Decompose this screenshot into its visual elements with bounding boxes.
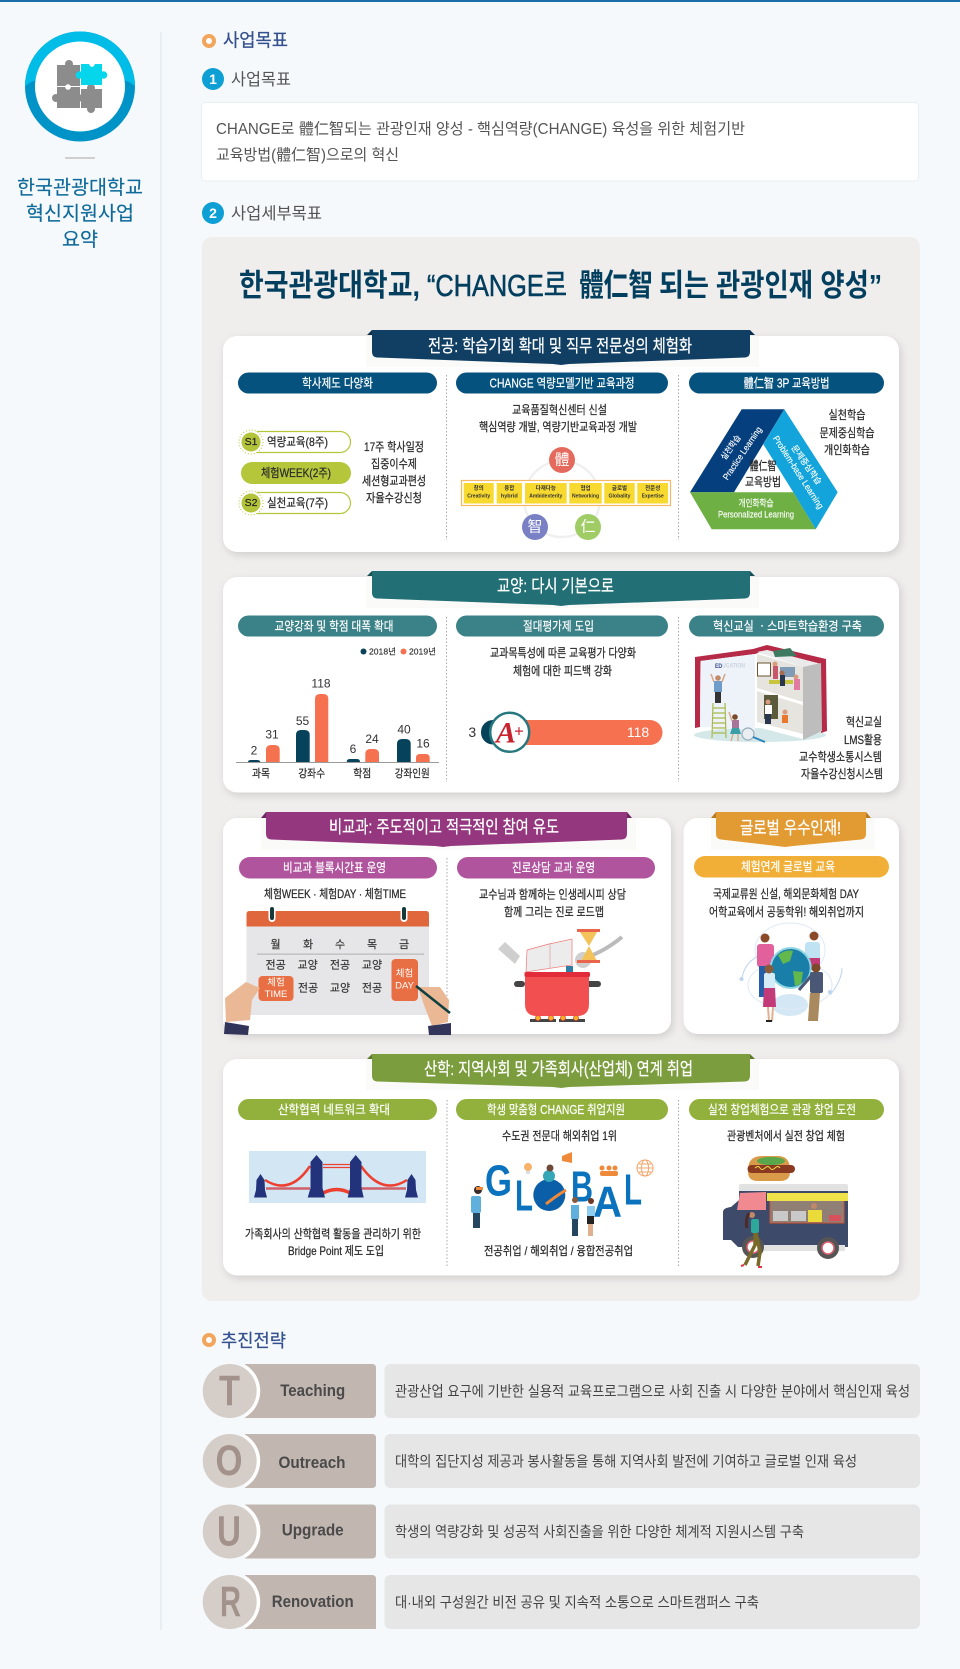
strategy row: Outreach: Outreach: [278, 1454, 346, 1472]
semester notes: 자율수강신청: [366, 491, 422, 505]
strategy row: Teaching: [203, 1364, 920, 1418]
subheading 1: 사업목표: 1: [209, 71, 217, 87]
strategy row: Upgrade: 학생의 역량강화 및 성공적 사회진출을 위한 다양한 체계적 지원시스템 구축: [395, 1524, 804, 1541]
subheading 2: 사업세부목표: [202, 202, 322, 224]
pill: 학사제도 다양화: [238, 372, 437, 394]
calendar illustration: 체험: [396, 968, 413, 980]
triangle diagram: 3P: [690, 409, 838, 529]
competency diagram: 창의: [474, 484, 484, 492]
calendar illustration: 체험: [267, 978, 285, 988]
pill: 학사제도 다양화: 학사제도 다양화: [302, 376, 373, 390]
ribbon: 글로벌 우수인재: 글로벌 우수인재!: [740, 818, 841, 838]
bridge point text: [245, 1227, 421, 1258]
illustration: GLOBAL lettering: [471, 1152, 653, 1236]
semester notes: 17주 학사일정: [364, 440, 424, 454]
pill: 혁신교실 스마트학습환경 구축: [689, 616, 884, 636]
learning methods text: 문제중심학습: [820, 426, 874, 440]
semester diagram: S2: [245, 497, 258, 509]
ribbon: 교양: 교양: 다시 기본으로: [497, 576, 614, 596]
panel title: 體仁智: [579, 268, 653, 303]
pill: 교양강좌 및 학점 대폭 확대: 교양강좌 및 학점 대폭 확대: [274, 620, 394, 634]
icon: puzzle emblem: [25, 32, 135, 142]
employment ranking text: 수도권 전문대 해외취업 1위: [502, 1129, 617, 1143]
competency diagram: Globality: [608, 494, 631, 500]
bar chart: [236, 677, 439, 780]
legend: 2018년: [369, 646, 396, 656]
strategy row: Upgrade: U: [217, 1508, 241, 1556]
heading: 추진전략: 추진전략: [221, 1331, 286, 1351]
bar chart: 과목: [252, 767, 270, 780]
goal text box: 교육방법(體仁智)으로의 혁신: [216, 146, 399, 164]
bar chart: 31: [265, 728, 279, 742]
subheading 2: 사업세부목표: 2: [209, 205, 217, 221]
strategy row: Teaching: Teaching: [280, 1382, 345, 1400]
classroom features text: 자율수강신청시스템: [801, 767, 883, 781]
evaluation text: 체험에 대한 피드백 강화: [513, 664, 612, 678]
pill: 3P 교육방법: 體仁智 3P 교육방법: [744, 376, 830, 390]
ribbon: 전공: [367, 330, 755, 365]
illustration: GLOBAL lettering: G: [485, 1156, 512, 1206]
panel: global talent: [684, 812, 899, 1034]
strategy row: Upgrade: Upgrade: [282, 1522, 344, 1540]
strategy row: Renovation: [203, 1575, 920, 1629]
strategy row: Teaching: T: [219, 1367, 240, 1415]
bar chart: 40: [397, 723, 411, 737]
sidebar title text: 한국관광대학교: [17, 177, 143, 199]
strategy row: Outreach: O: [216, 1437, 242, 1485]
competency diagram: Networking: [572, 494, 599, 500]
strategy row: Outreach: 대학의 집단지성 제공과 봉사활동을 통해 지역사회 발전에 기여하고 글로벌 인재 육성: [395, 1454, 857, 1470]
panel title: [239, 268, 882, 303]
competency diagram: 융합: [504, 484, 514, 492]
triangle diagram: 3P: 교육방법: [745, 475, 781, 489]
panel title: 되는: [659, 268, 709, 303]
illustration: education book: EDUCATION: [715, 662, 745, 670]
ribbon: 산학: [367, 1054, 755, 1088]
pill: 진로상담 교과 운영: [457, 857, 655, 878]
panel: major (전공): [223, 330, 899, 552]
timetable caption: 체험WEEK · 체험DAY · 체험TIME: [264, 887, 406, 901]
calendar illustration: 전공: [298, 982, 318, 994]
bridge point text: Bridge Point 제도 도입: [288, 1244, 384, 1258]
strategy row: Renovation: Renovation: [272, 1593, 354, 1611]
pill: 실전 창업체험으로 관광 창업 도전: 실전 창업체험으로 관광 창업 도전: [708, 1103, 856, 1117]
illustration: food truck: [723, 1156, 848, 1267]
calendar illustration: 교양: [362, 958, 382, 972]
subheading 1: 사업목표: 사업목표: [231, 70, 291, 89]
triangle diagram: 3P: 體仁智: [750, 458, 776, 473]
ribbon: 글로벌 우수인재: [711, 812, 871, 847]
pill: 진로상담 교과 운영: 진로상담 교과 운영: [512, 861, 595, 875]
career counseling text: [479, 888, 626, 919]
pill: 비교과 블록시간표 운영: 비교과 블록시간표 운영: [283, 861, 386, 875]
bar chart: 학점: [353, 767, 371, 780]
panel: extracurricular (비교과): [223, 812, 671, 1035]
bar chart: 16: [416, 737, 430, 751]
panel: liberal arts (교양): [223, 571, 899, 792]
strategy row: Renovation: R: [220, 1578, 241, 1626]
grade bar: 118: [627, 724, 649, 740]
semester notes: 세션형교과편성: [362, 474, 426, 488]
sidebar: program title: [17, 32, 143, 251]
semester diagram: [239, 430, 351, 515]
bridge point text: 가족회사의 산학협력 활동을 관리하기 위한: [245, 1227, 421, 1241]
learning methods text: [820, 407, 874, 457]
pill: 체험연계 글로벌 교육: [694, 856, 889, 878]
grade bar: [468, 713, 662, 752]
triangle diagram: 3P: Practice Learning: [721, 425, 764, 482]
semester diagram: 체험WEEK(2주): [261, 466, 331, 480]
bar chart: 55: [296, 714, 309, 728]
sidebar title text: 요약: [62, 229, 98, 251]
heading: 사업목표: 사업목표: [223, 30, 288, 50]
ribbon: 비교과: [261, 812, 632, 847]
pill: 절대평가제 도입: 절대평가제 도입: [523, 620, 594, 634]
strategy row: Teaching: 관광산업 요구에 기반한 실용적 교육프로그램으로 사회 진출 시 다양한 분야에서 핵심인재 육성: [395, 1384, 910, 1400]
triangle diagram: 3P: 실천학습: [719, 433, 743, 462]
pill: CHANGE 역량모델기반 교육과정: CHANGE 역량모델기반 교육과정: [490, 376, 634, 390]
calendar illustration: DAY: [395, 980, 415, 992]
global education text: [709, 887, 864, 919]
ribbon: 산학: 산학: 지역사회 및 가족회사(산업체) 연계 취업: [424, 1059, 693, 1079]
competency diagram: 仁: [580, 518, 596, 536]
sidebar title text: [17, 177, 143, 251]
ribbon: 교양: [367, 571, 755, 606]
competency diagram: 전문성: [645, 484, 660, 492]
competency diagram: 협업: [580, 484, 591, 492]
competency diagram: 다재다능: [536, 484, 556, 492]
calendar illustration: [224, 906, 451, 1035]
startup text: 관광벤처에서 실전 창업 체험: [727, 1129, 845, 1143]
competency text: 핵심역량 개발, 역량기반교육과정 개발: [479, 420, 637, 434]
calendar illustration: 전공: [330, 958, 350, 972]
ribbon: 비교과: 비교과: 주도적이고 적극적인 참여 유도: [329, 817, 559, 837]
bar chart: 강좌수: [298, 767, 325, 780]
illustration: tower bridge: [249, 1151, 426, 1203]
pill: 체험연계 글로벌 교육: 체험연계 글로벌 교육: [741, 860, 835, 874]
illustration: education book: [694, 645, 827, 742]
employment types text: 전공취업 / 해외취업 / 융합전공취업: [484, 1244, 633, 1258]
illustration: GLOBAL lettering: A: [593, 1178, 622, 1226]
pill: 산학협력 네트워크 확대: 산학협력 네트워크 확대: [278, 1103, 390, 1117]
panel: detailed goals: [202, 237, 920, 1301]
pill: CHANGE 역량모델기반 교육과정: [456, 372, 668, 394]
calendar illustration: 수: [335, 938, 345, 951]
classroom features text: 혁신교실: [846, 715, 882, 729]
strategy row: Outreach: [203, 1434, 920, 1488]
pill: 3P 교육방법: [689, 372, 884, 394]
goal text box: CHANGE로 體仁智되는 관광인재 양성 - 핵심역량(CHANGE) 육성을 위한 체험기반: [216, 120, 745, 138]
illustration: GLOBAL lettering: B: [571, 1162, 593, 1212]
competency diagram: Creativity: [467, 494, 491, 500]
calendar illustration: 교양: [330, 982, 350, 994]
competency text: 교육품질혁신센터 신설: [512, 403, 607, 417]
competency diagram: 글로벌: [612, 484, 627, 492]
panel title: 한국관광대학교,: [239, 268, 420, 303]
illustration: cooking pot: [498, 929, 622, 1022]
calendar illustration: 교양: [297, 958, 318, 972]
subheading 1: 사업목표: [202, 68, 291, 90]
evaluation text: 교과목특성에 따른 교육평가 다양화: [490, 646, 636, 660]
grade bar: 3: [468, 724, 476, 740]
pill: 교양강좌 및 학점 대폭 확대: [238, 616, 437, 636]
calendar illustration: 전공: [362, 982, 382, 994]
global education text: 국제교류원 신설, 해외문화체험 DAY: [713, 887, 859, 901]
career counseling text: 교수님과 함께하는 인생레시피 상담: [479, 888, 626, 902]
bar chart: 24: [365, 732, 379, 746]
learning methods text: 실천학습: [828, 407, 866, 422]
pill: 학생 맞춤형 CHANGE 취업지원: 학생 맞춤형 CHANGE 취업지원: [487, 1103, 625, 1117]
calendar illustration: TIME: [265, 989, 287, 1000]
illustration: GLOBAL lettering: L: [515, 1172, 533, 1220]
legend: 2019년: [409, 646, 436, 656]
strategy row: Upgrade: [203, 1504, 920, 1558]
competency text: [479, 403, 637, 434]
bar chart: 2: [251, 744, 258, 758]
illustration: people around globe: [740, 923, 842, 1021]
pill: 혁신교실 스마트학습환경 구축: 혁신교실 ㆍ스마트학습환경 구축: [713, 620, 862, 634]
illustration: GLOBAL lettering: L: [624, 1166, 642, 1214]
panel title: 관광인재 양성”: [716, 268, 882, 303]
bar chart: 강좌인원: [395, 767, 430, 780]
bar chart: 6: [350, 742, 357, 756]
competency diagram: Expertise: [642, 494, 664, 500]
calendar illustration: 화: [303, 938, 313, 951]
triangle diagram: 3P: 개인화학습: [738, 498, 774, 510]
triangle diagram: 3P: Problem-base Learning: [771, 434, 826, 511]
calendar illustration: 금: [399, 939, 409, 951]
semester notes: [362, 440, 426, 505]
triangle diagram: 3P: Personalized Learning: [718, 510, 794, 520]
evaluation text: [490, 646, 636, 678]
strategy row: Renovation: 대·내외 구성원간 비전 공유 및 지속적 소통으로 스마트캠퍼스 구축: [395, 1594, 759, 1612]
classroom features text: 교수학생소통시스템: [799, 750, 882, 764]
panel: industry (산학): [223, 1054, 899, 1276]
pill: 학생 맞춤형 CHANGE 취업지원: [456, 1099, 668, 1120]
calendar illustration: 목: [367, 938, 377, 951]
competency diagram: 智: [527, 518, 543, 536]
semester diagram: 실천교육(7주): [267, 495, 328, 510]
semester diagram: S1: [245, 436, 258, 448]
semester diagram: 역량교육(8주): [267, 435, 328, 449]
competency diagram: [462, 447, 670, 540]
classroom features text: [799, 715, 883, 781]
competency diagram: 體: [554, 452, 570, 468]
learning methods text: 개인화학습: [824, 443, 870, 457]
calendar illustration: 전공: [265, 958, 286, 972]
subheading 2: 사업세부목표: 사업세부목표: [231, 204, 322, 223]
competency diagram: hybrid: [501, 494, 518, 500]
bar chart: 118: [311, 677, 331, 691]
career counseling text: 함께 그리는 진로 로드맵: [504, 905, 604, 919]
semester notes: 집중이수제: [371, 457, 417, 471]
grade bar: +: [514, 722, 524, 740]
pill: 절대평가제 도입: [456, 616, 668, 636]
sidebar title text: 혁신지원사업: [26, 203, 134, 225]
global education text: 어학교육에서 공동학위! 해외취업까지: [709, 905, 864, 919]
pill: 비교과 블록시간표 운영: [239, 857, 437, 878]
legend: [360, 646, 436, 656]
goal text box: [202, 102, 918, 181]
grade bar: A: [494, 716, 516, 750]
ribbon: 전공: 전공: 학습기회 확대 및 직무 전문성의 체험화: [428, 336, 692, 356]
pill: 산학협력 네트워크 확대: [238, 1099, 437, 1120]
competency diagram: Ambidexterity: [529, 494, 563, 500]
classroom features text: LMS활용: [844, 733, 882, 747]
pill: 실전 창업체험으로 관광 창업 도전: [689, 1099, 884, 1120]
calendar illustration: 월: [271, 938, 281, 951]
triangle diagram: 3P: 문제중심학습: [789, 443, 824, 487]
panel title: “CHANGE로: [427, 268, 567, 303]
